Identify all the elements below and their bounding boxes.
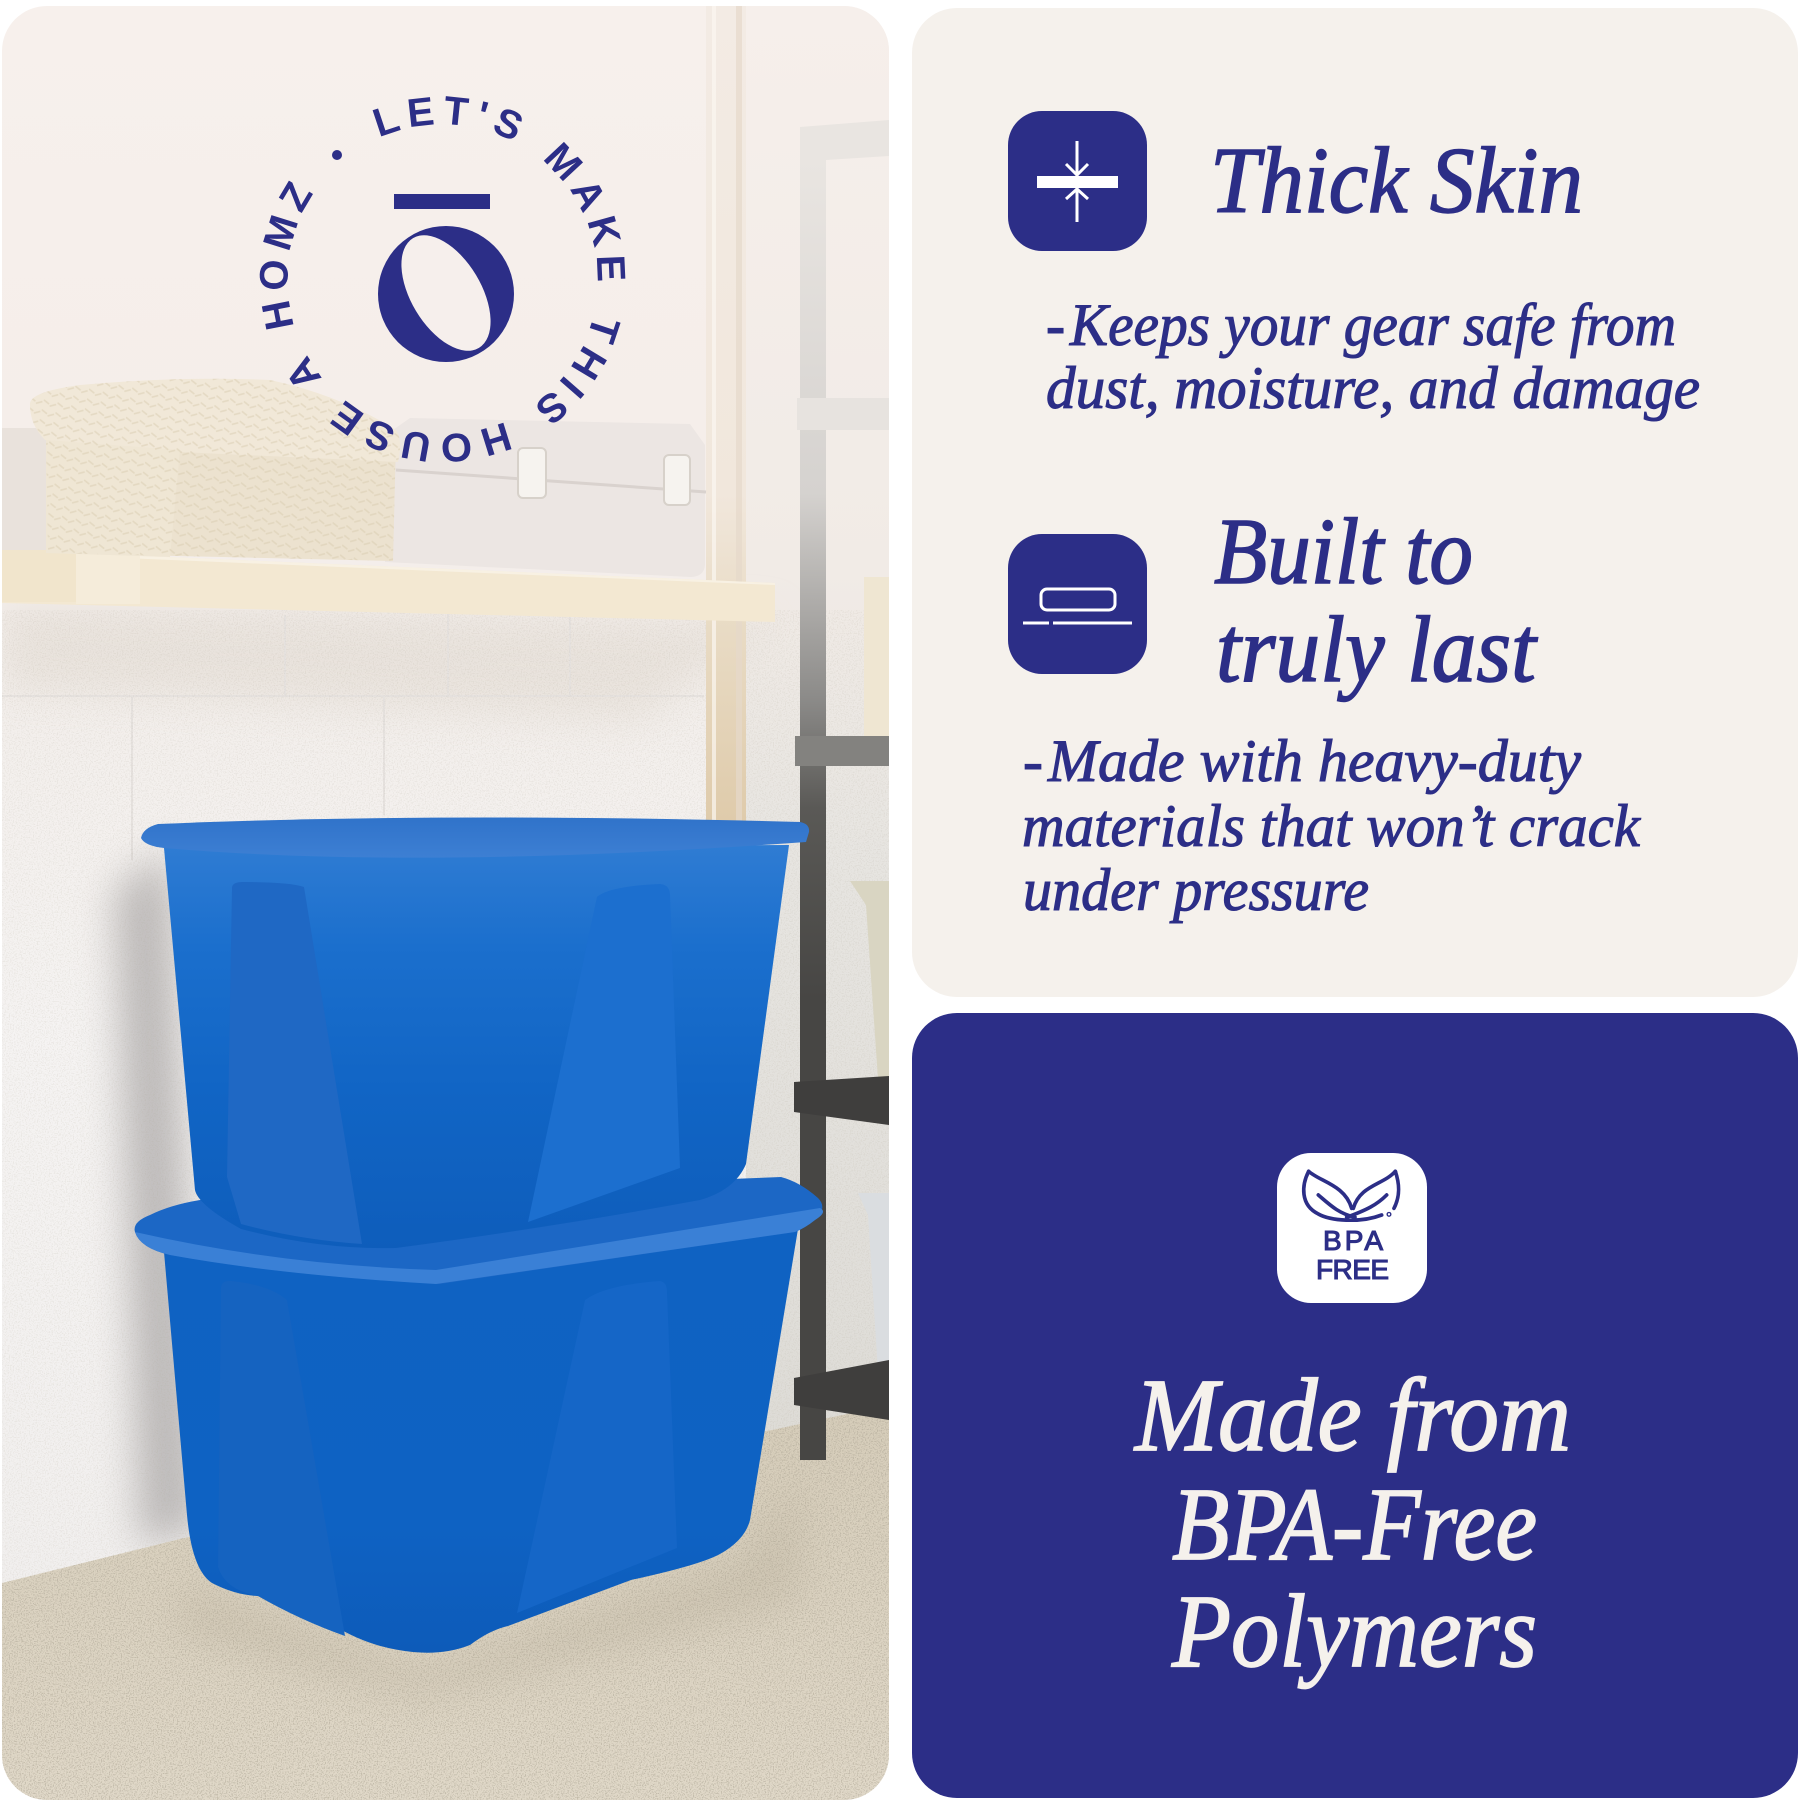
floor speckle texture bbox=[2, 1405, 889, 1800]
wall shadow next to bins bbox=[115, 850, 200, 1545]
upper bin handle recess right bbox=[528, 884, 680, 1222]
woven basket on shelf bbox=[30, 379, 400, 561]
upper bin handle recess left bbox=[227, 882, 362, 1244]
circular slogan text: LET'S MAKE THIS HOUSE A HOMZ bbox=[260, 96, 626, 462]
pipe bbox=[706, 6, 746, 821]
logo O mark bbox=[378, 220, 514, 366]
text: thick skin description bbox=[1046, 292, 1700, 421]
lower bin handle recess right bbox=[518, 1577, 602, 1612]
shadow band behind shelf items bbox=[2, 428, 46, 550]
shelf bbox=[2, 550, 775, 622]
upper bin body bbox=[164, 845, 789, 1248]
panel: features bbox=[912, 8, 1798, 997]
icon: thick skin bbox=[1008, 111, 1147, 251]
candle on rack bbox=[864, 577, 890, 737]
text: durability description: under pressure bbox=[1023, 857, 1369, 923]
logo macron bar bbox=[394, 194, 490, 209]
BPA panel background bbox=[912, 1013, 1798, 1798]
metal rack bbox=[794, 120, 889, 1460]
shadows under bins bbox=[192, 1530, 794, 1688]
clear tub on rack bbox=[858, 1193, 889, 1372]
icon: BPA free leaves badge: FREE bbox=[1316, 1254, 1389, 1285]
lower bin body bbox=[164, 1229, 798, 1653]
white case on shelf bbox=[385, 418, 706, 577]
heading: Thick Skin: Thick Skin bbox=[1210, 129, 1583, 233]
icon: durability bbox=[1008, 534, 1147, 674]
heading: Built to truly last: Built to bbox=[1214, 500, 1473, 604]
wall behind rack bbox=[746, 697, 889, 1432]
features background bbox=[912, 8, 1798, 997]
lower bin bbox=[135, 1177, 823, 1653]
heading: Made from BPA-Free Polymers: BPA-Free bbox=[1172, 1467, 1537, 1582]
icon: BPA free leaves badge bbox=[1277, 1153, 1427, 1303]
panel: product photo of stacked blue storage bins bbox=[2, 6, 890, 1800]
shelf shadow on wall bbox=[4, 606, 706, 716]
text: thick skin description: - Keeps your gear safe from bbox=[1046, 292, 1676, 358]
text: durability description: - Made with heavy-duty bbox=[1023, 728, 1581, 794]
floor bbox=[2, 1405, 889, 1800]
mortar lines bbox=[2, 695, 704, 860]
panel: BPA free bbox=[912, 1013, 1798, 1798]
upper bin bbox=[141, 817, 809, 1248]
text: thick skin description: dust, moisture, and damage bbox=[1046, 355, 1700, 421]
heading: Made from BPA-Free Polymers: Made from bbox=[1133, 1358, 1571, 1473]
lower bin handle recess left bbox=[256, 1596, 345, 1636]
text: durability description: materials that won’t crack bbox=[1022, 793, 1641, 859]
heading: Made from BPA-Free Polymers bbox=[1133, 1358, 1571, 1689]
icon: BPA free leaves badge: BPA bbox=[1323, 1225, 1383, 1256]
lower bin lid front edge bbox=[135, 1208, 823, 1284]
heading: Built to truly last: truly last bbox=[1216, 598, 1538, 702]
heading: Built to truly last bbox=[1214, 500, 1538, 702]
separator dot bbox=[332, 150, 342, 160]
wall speckle texture bbox=[2, 610, 889, 1585]
logo badge bbox=[260, 96, 626, 462]
beige tub on rack bbox=[850, 881, 889, 1079]
text: durability description bbox=[1022, 728, 1641, 923]
lower bin lid bbox=[135, 1177, 822, 1284]
upper bin lid bbox=[141, 817, 809, 858]
wall background bbox=[2, 6, 746, 1583]
heading: Made from BPA-Free Polymers: Polymers bbox=[1171, 1574, 1537, 1689]
